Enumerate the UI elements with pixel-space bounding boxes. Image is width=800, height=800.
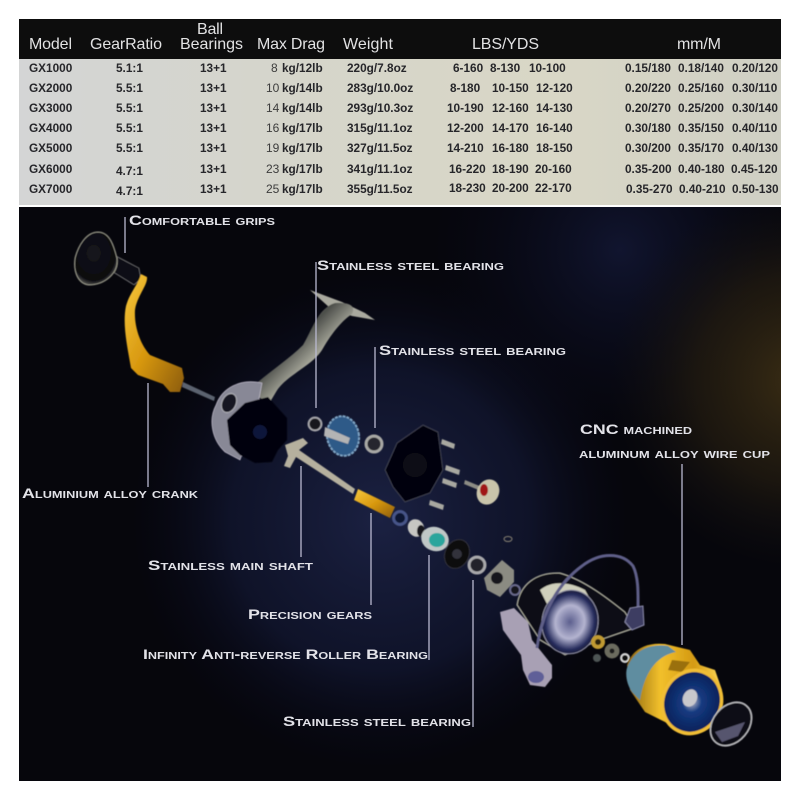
row GX3000: 293g/10.3oz: [347, 101, 413, 115]
row GX1000: 8-130: [490, 61, 521, 75]
row GX7000: 0.35-270: [626, 182, 673, 196]
row GX2000: GX2000: [29, 81, 73, 95]
row GX7000: 0.50-130: [732, 182, 779, 196]
row GX4000: 0.30/180: [625, 121, 671, 135]
row GX5000: GX5000: [29, 141, 73, 155]
row GX5000: 0.40/130: [732, 141, 778, 155]
row GX1000: 220g/7.8oz: [347, 61, 407, 75]
row GX4000: [29, 121, 778, 135]
row GX6000: 0.35-200: [625, 162, 672, 176]
table header bar: Model: [29, 36, 72, 53]
row GX5000: 0.35/170: [678, 141, 724, 155]
row GX3000: 0.30/140: [732, 101, 778, 115]
callout: infinity anti-reverse roller bearing: Infinity Anti-reverse Roller Bearing: [143, 646, 428, 662]
row GX7000: kg/17lb: [282, 182, 323, 196]
icon: spool cap: [702, 694, 760, 754]
icon: reel body with stem and foot: [212, 290, 375, 463]
row GX4000: GX4000: [29, 121, 73, 135]
table body background: [19, 59, 781, 205]
row GX6000: 13+1: [200, 162, 227, 176]
row GX1000: 6-160: [453, 61, 484, 75]
icon: bearings, nut and washers on shaft: [394, 512, 520, 597]
row GX2000: 0.25/160: [678, 81, 724, 95]
table header bar: mm/M: [677, 36, 721, 53]
icon: drive gear with bearings: [308, 414, 382, 458]
row GX2000: 13+1: [200, 81, 227, 95]
row GX5000: 14-210: [447, 141, 484, 155]
row GX6000: GX6000: [29, 162, 73, 176]
icon: gold CNC spool: [626, 644, 732, 743]
row GX4000: 12-200: [447, 121, 484, 135]
diagram background: [19, 207, 781, 781]
row GX3000: 0.25/200: [678, 101, 724, 115]
row GX4000: kg/17lb: [282, 121, 323, 135]
row GX2000: 0.30/110: [732, 81, 778, 95]
row GX3000: GX3000: [29, 101, 73, 115]
callout: stainless steel bearing, lower: Stainless steel bearing: [283, 713, 471, 729]
icon: red-centered knob: [464, 476, 503, 508]
row GX2000: 283g/10.0oz: [347, 81, 413, 95]
row GX7000: 25: [266, 182, 280, 196]
callout: precision gears: Precision gears: [248, 606, 372, 622]
row GX6000: 341g/11.1oz: [347, 162, 413, 176]
callout: stainless main shaft: Stainless main shaft: [148, 557, 313, 573]
row GX5000: 19: [266, 141, 280, 155]
row GX5000: 5.5:1: [116, 141, 143, 155]
row GX7000: GX7000: [29, 182, 73, 196]
row GX4000: 5.5:1: [116, 121, 143, 135]
row GX2000: 0.20/220: [625, 81, 671, 95]
row GX2000: 8-180: [450, 81, 481, 95]
icon: rotor with bail arm: [500, 556, 644, 687]
callout: precision gears: [248, 513, 372, 622]
row GX7000: 355g/11.5oz: [347, 182, 413, 196]
callout: CNC machined aluminum alloy wire cup: aluminum alloy wire cup: [579, 445, 770, 461]
row GX1000: GX1000: [29, 61, 73, 75]
panel: exploded reel diagram: [19, 207, 781, 781]
row GX3000: 0.20/270: [625, 101, 671, 115]
row GX5000: [29, 141, 778, 155]
row GX3000: 13+1: [200, 101, 227, 115]
row GX4000: 13+1: [200, 121, 227, 135]
row GX6000: 0.40-180: [678, 162, 725, 176]
row GX5000: 16-180: [492, 141, 529, 155]
row GX2000: 10: [266, 81, 280, 95]
row GX4000: 0.35/150: [678, 121, 724, 135]
row GX6000: 4.7:1: [116, 164, 143, 178]
table header bar: [19, 19, 781, 59]
row GX6000: 16-220: [449, 162, 486, 176]
row GX7000: 18-230: [449, 181, 486, 195]
callout: CNC machined aluminum alloy wire cup: [579, 421, 770, 645]
row GX4000: 14-170: [492, 121, 529, 135]
row GX3000: kg/14lb: [282, 101, 323, 115]
table header bar: Bearings: [180, 36, 243, 53]
row GX2000: 12-120: [536, 81, 573, 95]
row GX6000: 23: [266, 162, 280, 176]
icon: main shaft with gold sleeve: [284, 438, 395, 518]
row GX6000: 18-190: [492, 162, 529, 176]
row GX4000: 16-140: [536, 121, 573, 135]
row GX7000: 0.40-210: [679, 182, 726, 196]
icon: black side cover plate with screws: [385, 425, 460, 510]
row GX7000: 4.7:1: [116, 184, 143, 198]
row GX1000: 10-100: [529, 61, 566, 75]
icon: handle knob and crank: [75, 232, 215, 401]
row GX5000: 18-150: [536, 141, 573, 155]
callout: comfortable grips: Comfortable grips: [129, 212, 275, 228]
row GX7000: [29, 181, 779, 198]
row GX5000: 13+1: [200, 141, 227, 155]
table header bar: GearRatio: [90, 36, 162, 53]
row GX3000: 14: [266, 101, 280, 115]
row GX3000: 5.5:1: [116, 101, 143, 115]
row GX1000: 0.18/140: [678, 61, 724, 75]
row GX6000: 20-160: [535, 162, 572, 176]
row GX2000: kg/14lb: [282, 81, 323, 95]
callout: CNC machined aluminum alloy wire cup: CNC machined: [580, 421, 692, 437]
row GX1000: 13+1: [200, 61, 227, 75]
row GX3000: 10-190: [447, 101, 484, 115]
row GX5000: kg/17lb: [282, 141, 323, 155]
row GX5000: 327g/11.5oz: [347, 141, 413, 155]
row GX3000: 12-160: [492, 101, 529, 115]
row GX2000: 5.5:1: [116, 81, 143, 95]
row GX6000: [29, 162, 778, 178]
row GX6000: kg/17lb: [282, 162, 323, 176]
row GX1000: 8: [271, 61, 278, 75]
row GX6000: 0.45-120: [731, 162, 778, 176]
row GX2000: 10-150: [492, 81, 529, 95]
row GX1000: 5.1:1: [116, 61, 143, 75]
row GX1000: [29, 61, 778, 75]
row GX4000: 16: [266, 121, 280, 135]
table header bar: Weight: [343, 36, 394, 53]
table header bar: Max Drag: [257, 36, 325, 53]
row GX1000: kg/12lb: [282, 61, 323, 75]
row GX7000: 22-170: [535, 181, 572, 195]
table header bar: LBS/YDS: [472, 36, 539, 53]
row GX3000: [29, 101, 778, 115]
callout: stainless steel bearing, upper: Stainless steel bearing: [317, 257, 504, 273]
row GX3000: 14-130: [536, 101, 573, 115]
row GX5000: 0.30/200: [625, 141, 671, 155]
callout: aluminium alloy crank: Aluminium alloy crank: [22, 485, 199, 501]
icon: small nut, gear and washer: [591, 635, 629, 662]
table header bar: Ball: [197, 21, 223, 38]
row GX4000: 315g/11.1oz: [347, 121, 413, 135]
row GX7000: 13+1: [200, 182, 227, 196]
row GX1000: 0.15/180: [625, 61, 671, 75]
row GX4000: 0.40/110: [732, 121, 778, 135]
specification table: [19, 19, 781, 205]
row GX7000: 20-200: [492, 181, 529, 195]
row GX1000: 0.20/120: [732, 61, 778, 75]
callout: stainless steel bearing, middle: Stainless steel bearing: [379, 342, 566, 358]
row GX2000: [29, 81, 778, 95]
